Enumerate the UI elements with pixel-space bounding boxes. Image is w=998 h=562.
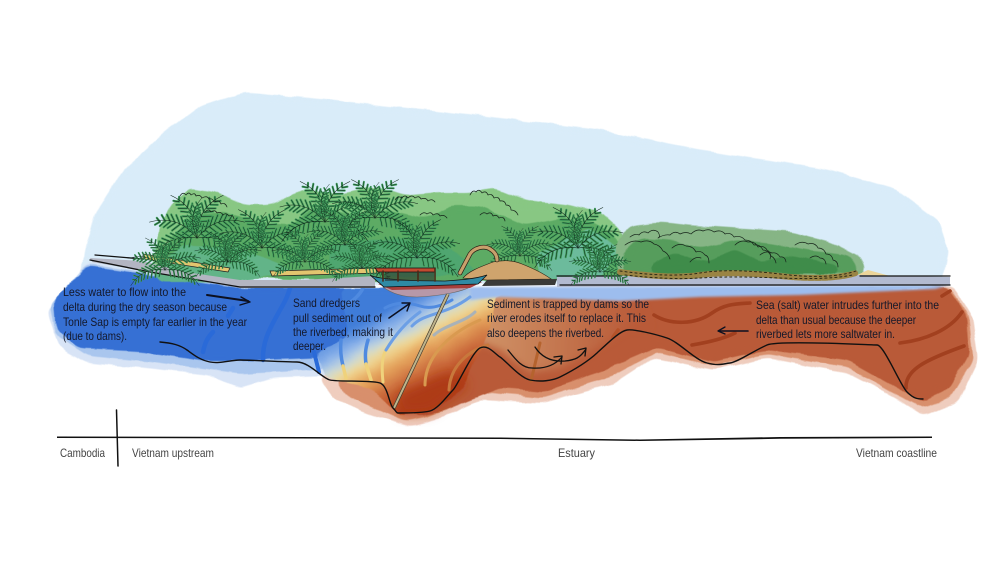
label: Estuary: Estuary [558,446,595,460]
text: sand dredgers: the riverbed, making it [293,325,394,339]
arrow: salt water intrusion [718,327,748,334]
tree canopy outlines [180,190,838,267]
text: sea water: delta than usual because the deeper [756,313,916,327]
saltwater intrusion: red estuary [316,285,978,426]
erosion arrows [508,347,586,368]
current strokes: red in estuary [531,291,964,388]
sand dredger boat [370,268,487,297]
palm trees [129,179,632,286]
land strips behind the bank [143,254,890,276]
arrow: low water flow [207,295,250,305]
arrow: sediment pulled up [389,303,410,318]
dock [482,279,557,286]
text: sea water: riverbed lets more saltwater in. [756,327,895,341]
mangrove roots [620,271,856,279]
text: sea water: Sea (salt) water intrudes further into the [756,298,939,312]
label: Vietnam upstream: Vietnam upstream [132,446,214,460]
sky wash [80,92,948,285]
text: less water: delta during the dry season because [63,300,227,314]
river water: blue upstream [47,262,425,388]
grey river banks [90,255,950,288]
trees: foliage washes [150,186,866,282]
text: sediment: also deepens the riverbed. [487,326,604,340]
label: Vietnam coastline: Vietnam coastline [856,446,937,460]
riverbed profile line [160,330,923,413]
text: sediment: river erodes itself to replace it. This [487,311,646,325]
text: less water: Tonle Sap is empty far earlier in the year [63,315,247,329]
distance axis [57,410,932,466]
text: less water: Less water to flow into the [63,285,186,299]
text: less water: (due to dams). [63,329,127,343]
dredging suction pipe [394,294,448,408]
current strokes: blue and yellow [203,288,488,390]
text: sediment: Sediment is trapped by dams so the [487,297,649,311]
text: sand dredgers: pull sediment out of [293,311,383,325]
text: sand dredgers: deeper. [293,339,326,353]
sand pile with dredge pipe [460,247,551,280]
label: Cambodia: Cambodia [60,446,105,460]
text: sand dredgers: Sand dredgers [293,296,360,310]
